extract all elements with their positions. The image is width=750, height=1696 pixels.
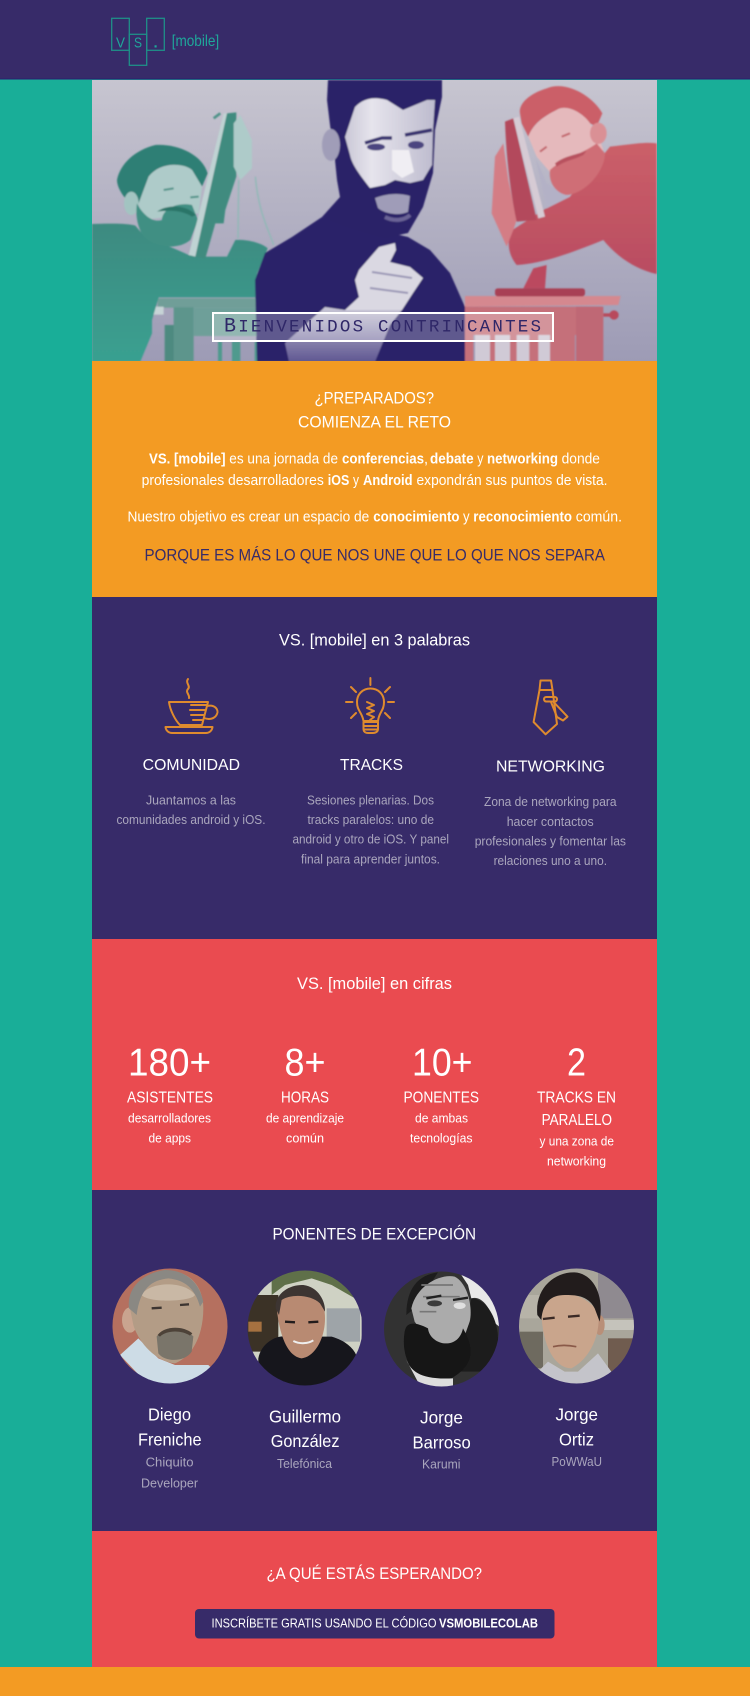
stat: 2 tracks: networking: [547, 1153, 606, 1168]
speaker: Diego Freniche: Diego: [148, 1405, 191, 1425]
column: networking: hacer contactos: [507, 814, 594, 829]
stat: 10+ ponentes: de ambas: [415, 1111, 468, 1126]
speaker: Jorge Ortiz: PoWWaU: [552, 1454, 602, 1469]
speaker: Jorge Ortiz: Ortiz: [559, 1429, 594, 1449]
speaker: Guillermo González: Guillermo: [269, 1407, 341, 1427]
text: intro paragraph: y: [353, 473, 360, 489]
heading: ponentes: PONENTES DE EXCEPCIÓN: [272, 1224, 476, 1243]
heading: preparados: COMIENZA EL RETO: [298, 413, 451, 432]
avatar: Jorge Ortiz: [518, 1267, 636, 1388]
stat: 180+ asistentes: ASISTENTES: [127, 1090, 213, 1107]
stat: 8+ horas: [266, 1042, 344, 1146]
center man pointing: [255, 80, 465, 362]
text: intro paragraph: y: [477, 451, 484, 467]
text: objective: Nuestro objetivo es crear un espacio de: [128, 510, 369, 526]
text: intro paragraph: ,: [424, 451, 428, 467]
column: tracks: Sesiones plenarias. Dos: [307, 792, 434, 807]
button: inscribete: VSMOBILECOLAB: [439, 1616, 538, 1631]
column: networking: profesionales y fomentar las: [475, 834, 626, 849]
avatar: Diego Freniche: [112, 1268, 228, 1384]
column: comunidad: COMUNIDAD: [143, 757, 240, 774]
hero caption box: BIENVENIDOS CONTRINCANTES: [224, 316, 541, 339]
icon: coffee cup: [166, 679, 218, 733]
stat: 8+ horas: de aprendizaje: [266, 1111, 344, 1126]
button: inscribete: [195, 1609, 554, 1638]
text: objective: y: [463, 510, 470, 526]
text: objective: común.: [576, 510, 622, 526]
text: objective: [128, 510, 622, 526]
text: intro paragraph: Android: [363, 473, 412, 489]
stat: 2 tracks: y una zona de: [540, 1133, 614, 1148]
stat: 180+ asistentes: de apps: [148, 1131, 191, 1146]
logo: VS. [mobile]: S: [134, 35, 142, 52]
column: tracks: TRACKS: [340, 757, 403, 774]
text: intro paragraph: [142, 451, 608, 489]
text: intro paragraph: expondrán sus puntos de vista.: [416, 473, 608, 489]
column: comunidad: [116, 757, 266, 827]
heading: 3 palabras: VS. [mobile] en 3 palabras: [279, 631, 470, 650]
heading: a que estas esperando: ¿A QUÉ ESTÁS ESPERANDO?: [266, 1564, 482, 1583]
stat: 180+ asistentes: 180+: [128, 1042, 211, 1085]
speaker: Jorge Barroso: Jorge: [420, 1407, 463, 1427]
right red man and table: [463, 86, 657, 362]
column: comunidad: comunidades android y iOS.: [116, 812, 266, 827]
speaker: Jorge Barroso: Karumi: [422, 1457, 461, 1472]
avatar: Guillermo González: [245, 1268, 362, 1392]
panel: intro orange: [92, 361, 657, 597]
tagline: PORQUE ES MÁS LO QUE NOS UNE QUE LO QUE NOS SEPARA: [144, 546, 606, 565]
text: objective: conocimiento: [373, 510, 460, 526]
column: tracks: final para aprender juntos.: [301, 851, 440, 866]
stat: 2 tracks: TRACKS EN: [537, 1090, 616, 1107]
column: networking: relaciones uno a uno.: [494, 853, 607, 868]
hero image: three men duotone: [92, 80, 657, 362]
stat: 10+ ponentes: tecnologías: [410, 1131, 473, 1146]
speaker: Jorge Barroso: [412, 1407, 471, 1472]
text: intro paragraph: debate: [430, 451, 474, 467]
column: tracks: tracks paralelos: uno de: [308, 812, 434, 827]
panel: cifras: [92, 939, 657, 1190]
speaker: Jorge Ortiz: [552, 1405, 602, 1469]
footer bar: [0, 1667, 750, 1696]
speaker: Diego Freniche: Developer: [141, 1475, 199, 1490]
stat: 8+ horas: 8+: [284, 1042, 326, 1085]
speaker: Guillermo González: Telefónica: [277, 1456, 333, 1471]
stat: 10+ ponentes: PONENTES: [404, 1090, 479, 1107]
panel: ponentes: [92, 1190, 657, 1531]
logo: VS. [mobile]: [112, 18, 219, 65]
heading: preparados: [298, 389, 451, 432]
speaker: Jorge Ortiz: Jorge: [556, 1405, 598, 1425]
left teal man and table: [92, 112, 274, 362]
text: intro paragraph: conferencias: [342, 451, 424, 467]
text: intro paragraph: es una jornada de: [229, 451, 338, 467]
column: networking: Zona de networking para: [484, 794, 617, 809]
stat: 10+ ponentes: 10+: [412, 1042, 472, 1085]
logo: VS. [mobile]: [mobile]: [172, 33, 219, 50]
text: intro paragraph: iOS: [328, 473, 350, 489]
text: intro paragraph: profesionales desarrolladores: [142, 473, 324, 489]
stat: 180+ asistentes: desarrolladores: [128, 1111, 211, 1126]
speaker: Diego Freniche: [138, 1405, 202, 1490]
speaker: Guillermo González: González: [271, 1431, 340, 1451]
stat: 8+ horas: común: [286, 1131, 324, 1146]
avatar: Jorge Barroso: [381, 1268, 501, 1388]
header bar with logo: [0, 0, 750, 80]
icon: necktie: [534, 680, 568, 734]
heading: cifras: VS. [mobile] en cifras: [297, 974, 452, 993]
speaker: Jorge Barroso: Barroso: [412, 1432, 471, 1452]
speaker: Guillermo González: [269, 1407, 341, 1471]
panel: 3 palabras: [92, 597, 657, 939]
stat: 2 tracks: 2: [567, 1042, 586, 1085]
text: objective: reconocimiento: [473, 510, 572, 526]
stat: 2 tracks: [537, 1042, 616, 1168]
column: tracks: [292, 757, 449, 866]
stat: 2 tracks: PARALELO: [542, 1112, 612, 1129]
panel: call to action: [92, 1531, 657, 1667]
logo: VS. [mobile]: V: [116, 35, 125, 52]
speaker: Diego Freniche: Freniche: [138, 1429, 202, 1449]
column: tracks: android y otro de iOS. Y panel: [292, 832, 449, 847]
text: intro paragraph: VS. [mobile]: [149, 451, 226, 467]
column: networking: NETWORKING: [496, 759, 605, 776]
icon: light bulb: [346, 678, 394, 733]
logo: VS. [mobile]: .: [154, 35, 158, 52]
text: intro paragraph: donde: [562, 451, 600, 467]
text: intro paragraph: networking: [487, 451, 558, 467]
stat: 8+ horas: HORAS: [281, 1090, 329, 1107]
column: networking: [475, 759, 626, 868]
stat: 180+ asistentes: [127, 1042, 213, 1146]
speaker: Diego Freniche: Chiquito: [146, 1455, 194, 1470]
heading: preparados: ¿PREPARADOS?: [314, 389, 434, 408]
button: inscribete: INSCRÍBETE GRATIS USANDO EL CÓDIGO: [212, 1616, 436, 1631]
stat: 10+ ponentes: [404, 1042, 479, 1146]
column: comunidad: Juantamos a las: [146, 792, 236, 807]
